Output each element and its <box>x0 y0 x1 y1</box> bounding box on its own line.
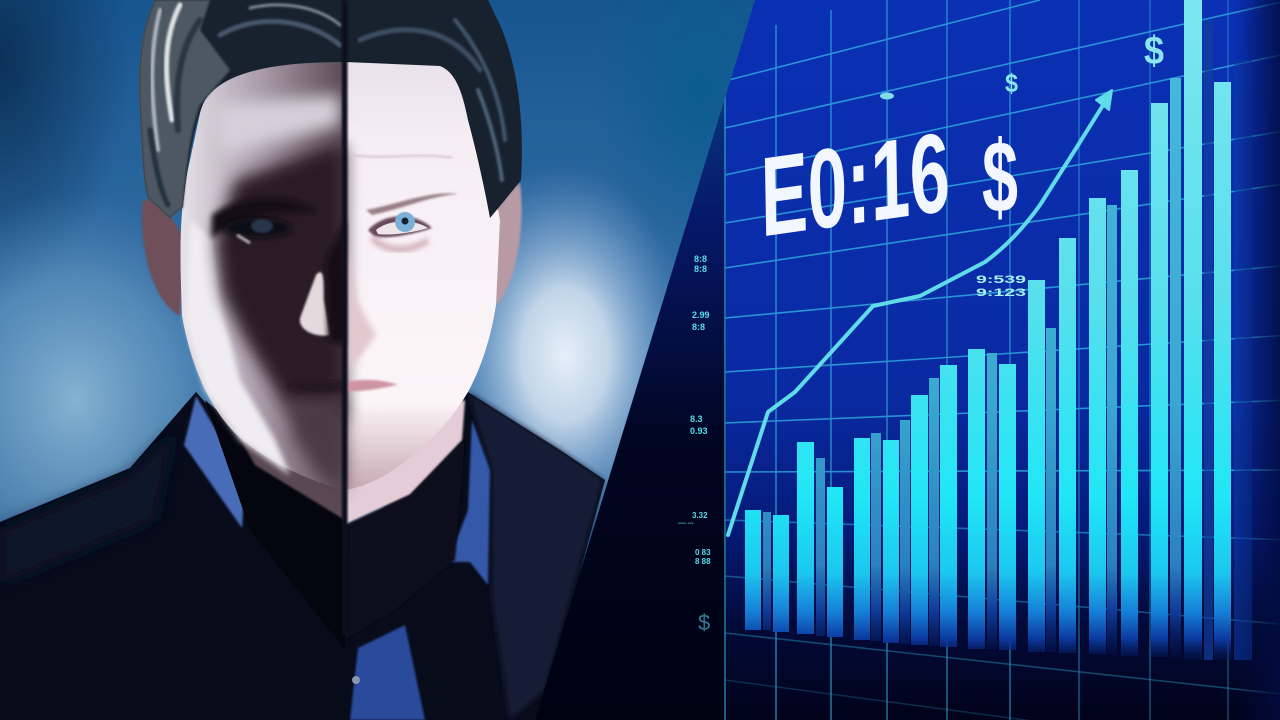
shirt left collar <box>184 396 245 528</box>
grid <box>725 0 1280 720</box>
jacket <box>0 392 605 720</box>
axis labels <box>678 254 711 635</box>
right mouth <box>347 380 398 391</box>
left eyebrow <box>212 198 318 238</box>
hair grey side <box>139 0 230 218</box>
ear right <box>480 183 522 308</box>
neck right <box>345 400 465 525</box>
shirt dark opening <box>345 440 465 640</box>
axis labels: 8:8 <box>694 254 707 264</box>
neck shadow <box>205 400 345 650</box>
left mouth <box>287 382 345 392</box>
axis labels: 2.99 <box>692 310 710 320</box>
shirt right collar <box>448 420 490 585</box>
axis labels: $ <box>698 610 710 635</box>
top dollar signs <box>1005 34 1164 94</box>
trend line arrow <box>728 90 1112 535</box>
button <box>352 676 360 684</box>
left forehead highlight <box>212 95 340 155</box>
axis labels: 8:8 <box>694 264 707 274</box>
left eye <box>224 218 292 243</box>
left jaw shadow <box>285 395 345 490</box>
neck left <box>235 430 345 520</box>
right eyebrow <box>366 193 458 215</box>
axis labels: 8:8 <box>692 322 705 332</box>
ear left <box>142 200 186 316</box>
axis marker <box>880 92 894 100</box>
mid-chart figure: 9:123 <box>976 287 1026 299</box>
panel background <box>530 0 1280 720</box>
jacket left shoulder shading <box>0 430 175 585</box>
axis labels: 8.3 <box>690 414 703 424</box>
hair streaks <box>150 5 505 205</box>
background: blue studio light <box>0 0 800 720</box>
left face shadow <box>215 145 345 420</box>
shirt placket <box>350 625 425 720</box>
readout: E0:16 $: $ <box>982 120 1018 234</box>
right nose shadow <box>348 240 376 370</box>
right eye <box>368 212 432 249</box>
top dollar signs: $ <box>1005 68 1018 98</box>
nose highlight <box>300 272 330 336</box>
left dark margin <box>536 96 726 720</box>
axis labels: 3.32 <box>692 511 708 520</box>
right edge vignette <box>1235 0 1280 720</box>
axis labels: 0 83 <box>695 548 711 557</box>
chart panel <box>530 0 1280 720</box>
jacket right lapel <box>468 392 603 720</box>
axis labels: 8 88 <box>695 557 711 566</box>
axis labels: 0.93 <box>690 426 708 436</box>
mid-chart figure: 9:539 <box>976 274 1026 286</box>
bars <box>745 0 1252 660</box>
readout: E0:16 $ <box>764 134 1018 236</box>
top dollar signs: $ <box>1144 29 1164 73</box>
person: split portrait <box>0 0 605 720</box>
readout: E0:16 $: E0:16 <box>751 109 957 260</box>
mid-chart figure <box>976 276 1026 296</box>
axis labels: ---- --- <box>678 521 694 527</box>
hair mass <box>139 0 522 218</box>
face left half <box>180 55 345 490</box>
face right half <box>345 55 500 490</box>
left cheek highlight <box>185 220 290 475</box>
right forehead crease <box>352 155 452 158</box>
dividing line <box>342 0 348 635</box>
nose shadow <box>326 220 345 345</box>
